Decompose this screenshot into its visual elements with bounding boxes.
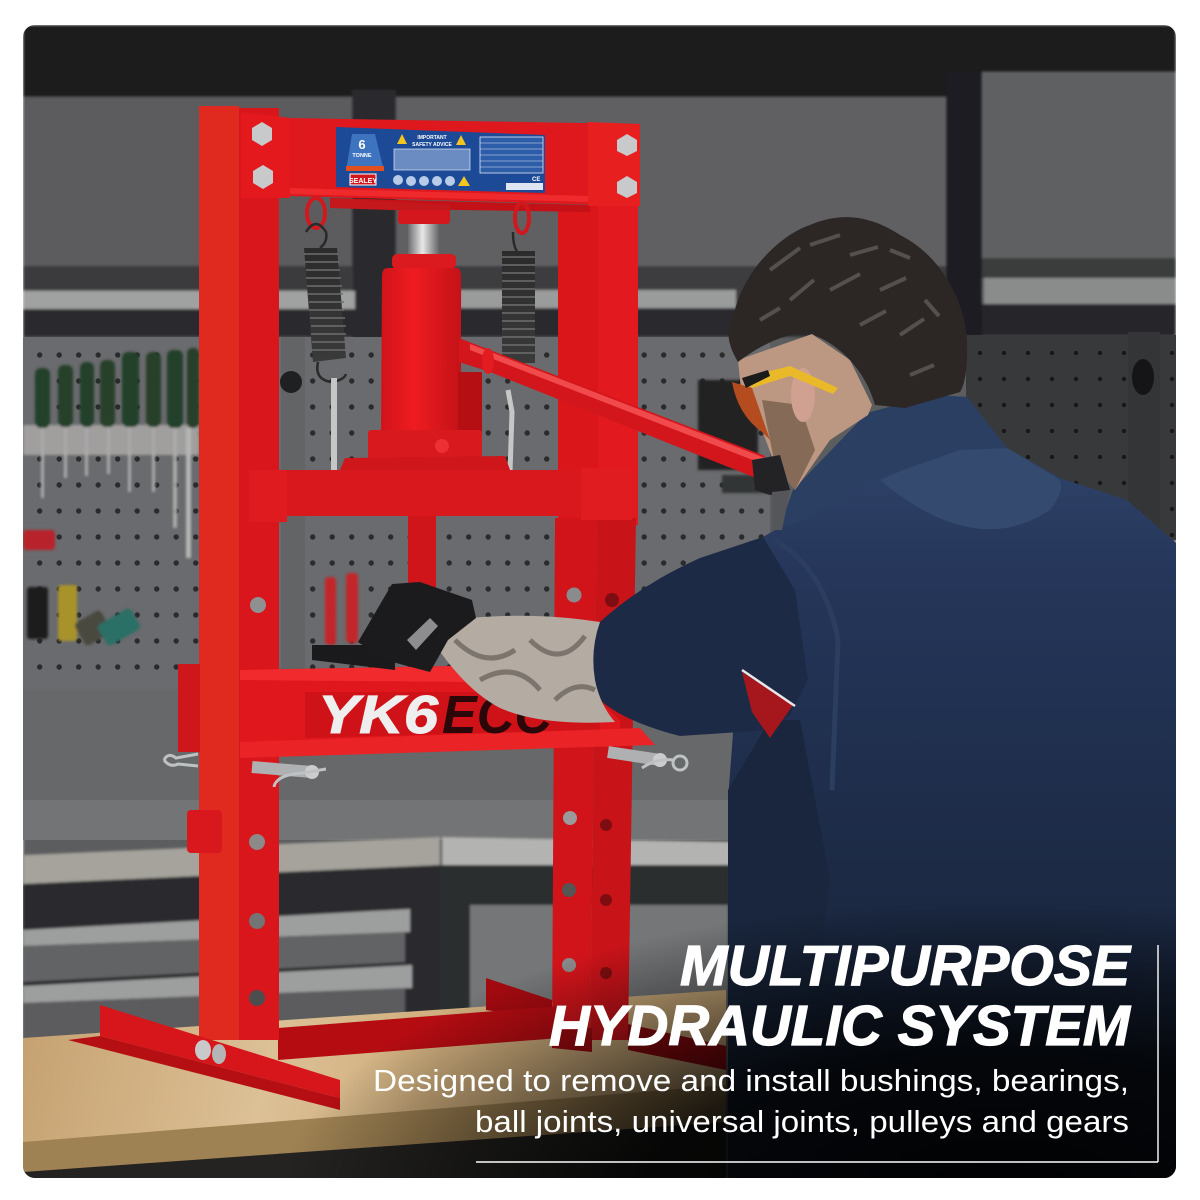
sleeve <box>578 537 808 736</box>
safety label: SAFETY ADVICE <box>412 142 453 148</box>
return springs <box>304 198 535 472</box>
tattooed arm <box>432 616 615 723</box>
red underarm panel <box>742 672 793 738</box>
safety label: 6 <box>358 137 366 152</box>
safety label <box>336 127 545 193</box>
lower bed <box>240 645 655 758</box>
rear upright <box>552 205 638 1040</box>
bottle jack <box>330 198 510 470</box>
collar <box>786 396 974 510</box>
heading: HYDRAULIC SYSTEM <box>549 994 1131 1058</box>
caption shade <box>313 924 1176 1178</box>
top beam <box>241 112 640 212</box>
hair <box>728 217 967 408</box>
press base <box>278 978 726 1070</box>
lower bed: YK6 <box>318 685 439 745</box>
glove cuff <box>772 490 790 530</box>
middle beam <box>279 470 632 588</box>
heading <box>549 934 1132 1058</box>
safety label: TONNE <box>352 153 372 159</box>
hydraulic press <box>68 106 765 1110</box>
stubble <box>762 400 815 490</box>
back yoke seam <box>880 448 1061 529</box>
heading: MULTIPURPOSE <box>680 934 1132 998</box>
lower cabinets <box>23 837 730 1040</box>
description text: Designed to remove and install bushings, bearings, <box>373 1063 1129 1098</box>
hanging tools <box>23 348 782 647</box>
glove <box>358 582 476 672</box>
hand on handle <box>752 455 790 495</box>
vest torso <box>728 395 1176 1180</box>
safety label: SEALEY <box>349 178 377 185</box>
locking pins <box>164 752 687 787</box>
ear <box>791 368 815 422</box>
armhole trim <box>811 573 840 790</box>
neck and face <box>738 334 872 490</box>
technician <box>358 217 1176 1180</box>
front upright <box>178 106 279 1040</box>
safety label: IMPORTANT <box>417 135 447 141</box>
description text <box>373 1063 1129 1139</box>
caption frame lines <box>476 945 1158 1162</box>
icons: bolts <box>252 122 272 146</box>
lower bed: ECC <box>442 685 553 745</box>
safety label: CE <box>532 177 540 183</box>
safety glasses <box>732 366 838 440</box>
pegboards <box>23 332 1176 840</box>
front foot <box>68 1005 340 1110</box>
pump handle <box>459 338 765 478</box>
vest dark front <box>728 720 829 875</box>
description text: ball joints, universal joints, pulleys and gears <box>475 1104 1129 1139</box>
workbench <box>23 990 726 1178</box>
